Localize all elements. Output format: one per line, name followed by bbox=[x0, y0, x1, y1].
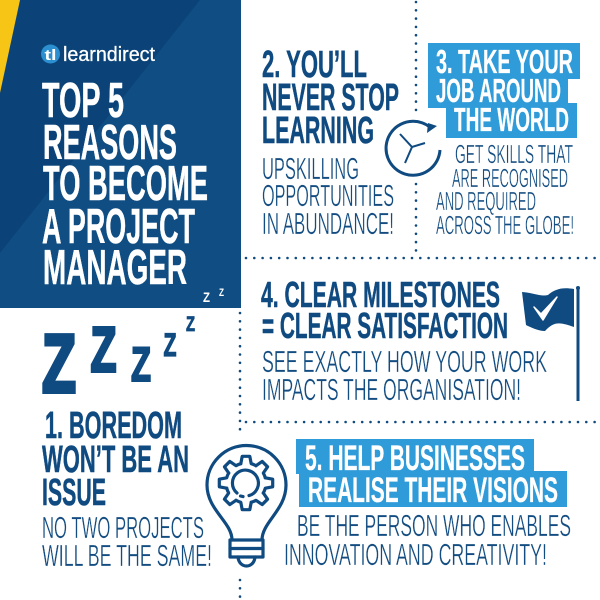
icon: clock with arrow bbox=[386, 121, 440, 175]
icon: small white z letters: Z bbox=[219, 287, 224, 299]
divider dots bbox=[240, 2, 600, 600]
logo: learndirect: tl bbox=[44, 47, 56, 64]
section 5: body bbox=[284, 509, 571, 572]
section 1: zzz icon: Z bbox=[186, 313, 195, 336]
section 2: body: IN ABUNDANCE! bbox=[262, 207, 394, 241]
title bbox=[42, 74, 208, 295]
section 2: body: OPPORTUNITIES bbox=[262, 179, 394, 213]
section 1: zzz icon: Z bbox=[131, 339, 151, 392]
section 1: zzz icon: Z bbox=[90, 314, 116, 386]
section 1: heading: WON’T BE AN bbox=[42, 439, 189, 481]
section 3: heading highlight bbox=[428, 43, 580, 138]
section 4: body bbox=[262, 345, 547, 407]
section 2: heading bbox=[262, 44, 399, 152]
title: A PROJECT bbox=[42, 200, 195, 254]
section 1: heading: 1. BOREDOM bbox=[45, 405, 182, 447]
section 4: heading bbox=[261, 274, 508, 346]
section 1: body: WILL BE THE SAME! bbox=[42, 539, 212, 573]
icon: small white z letters: Z bbox=[203, 289, 210, 305]
logo: learndirect: learndirect bbox=[63, 44, 155, 66]
title: TOP 5 bbox=[42, 74, 124, 128]
section 1: zzz icon: Z bbox=[164, 327, 176, 363]
title: MANAGER bbox=[43, 241, 187, 295]
section 1: zzz icon: Z bbox=[42, 317, 76, 410]
section 2: heading: LEARNING bbox=[262, 110, 374, 152]
section 1: zzz icon bbox=[42, 313, 195, 410]
section 2: body: UPSKILLING bbox=[262, 152, 359, 186]
title: REASONS bbox=[43, 116, 177, 170]
title: TO BECOME bbox=[43, 157, 208, 211]
icon: light bulb with gear bbox=[207, 446, 286, 566]
section 2: heading: NEVER STOP bbox=[262, 77, 399, 119]
section 1: heading bbox=[42, 405, 189, 514]
section 5: heading highlight bbox=[296, 439, 567, 510]
section 2: body bbox=[262, 152, 394, 241]
icon: small white z letters bbox=[203, 287, 224, 305]
icon: flag with check mark bbox=[522, 286, 580, 401]
section 1: body bbox=[42, 511, 212, 573]
section 3: body bbox=[436, 139, 574, 240]
section 1: body: NO TWO PROJECTS bbox=[42, 511, 204, 545]
section 2: heading: 2. YOU’LL bbox=[262, 44, 367, 86]
section 1: heading: ISSUE bbox=[42, 472, 106, 514]
panel: title background bbox=[0, 0, 241, 308]
